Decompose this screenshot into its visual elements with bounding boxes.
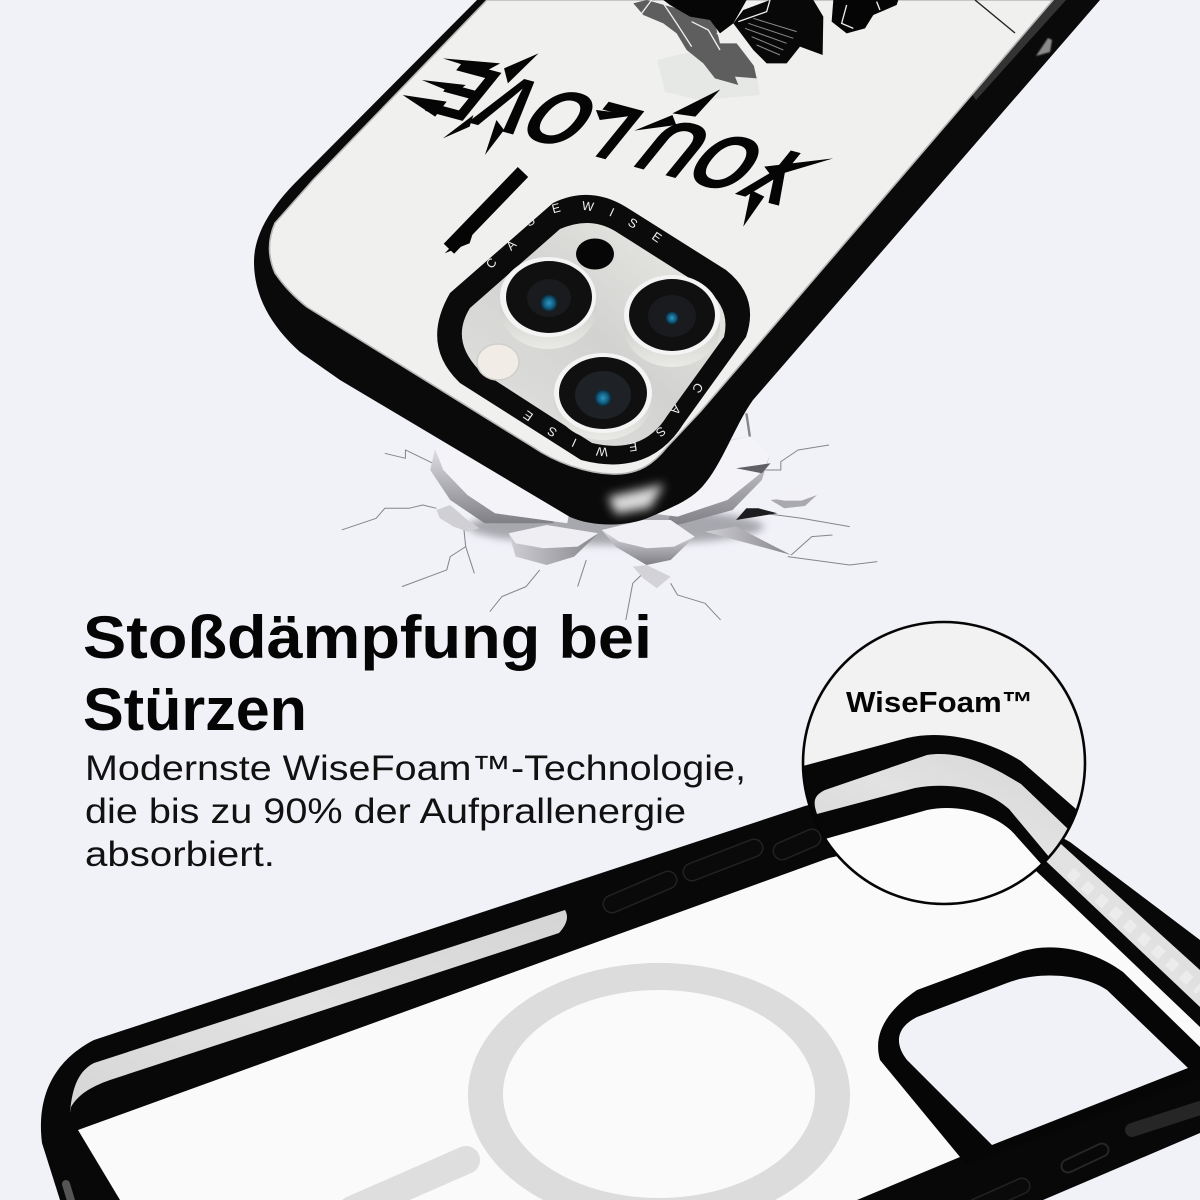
crust: left slab top [435, 430, 581, 523]
clear back [78, 830, 1200, 1200]
rose striped petal [733, 0, 823, 63]
shard E [633, 565, 671, 588]
magnet ring [468, 963, 850, 1200]
foam strip right [1030, 825, 1200, 1007]
bumper label: CASEWISE: E [550, 201, 562, 216]
lens 3 [554, 353, 652, 440]
magnet bar [352, 1160, 466, 1200]
rose grey petal [633, 0, 757, 85]
rose separate petal [832, 0, 898, 33]
shard C [436, 505, 479, 532]
case frame [41, 770, 1200, 1200]
callout: WiseFoam magnifier [802, 620, 1086, 906]
body text: Modernste WiseFoam™-Technologie, [85, 749, 746, 788]
magnifier outline [803, 622, 1085, 904]
bumper highlight at corner [608, 484, 664, 514]
bumper label: CASEWISE: I [607, 205, 616, 220]
crack shadow [467, 508, 764, 545]
rose detail [633, 0, 898, 85]
dark fissures [736, 463, 770, 473]
body text [85, 749, 746, 874]
flash [477, 344, 519, 380]
rose veins [642, 0, 880, 68]
shard B [602, 520, 695, 565]
camera window rim [878, 947, 1200, 1165]
panel: phone with case [254, 0, 1100, 525]
heading: Stoßdämpfung bei [83, 604, 652, 671]
bumper label: CASEWISE: S [653, 424, 668, 440]
body text: absorbiert. [85, 835, 275, 874]
callout label: WiseFoam™ [846, 687, 1033, 719]
shard A [509, 525, 598, 565]
lens 2 [624, 275, 720, 367]
bumper label: CASEWISE: W [581, 199, 595, 214]
bumper grey sheen [972, 0, 1066, 100]
crust: right raised slab [667, 437, 770, 527]
bumper label: CASEWISE: W [595, 444, 609, 459]
bumper label: CASEWISE: A [667, 402, 684, 418]
camera window opening [899, 976, 1188, 1145]
body text: die bis zu 90% der Aufprallenergie [85, 792, 686, 831]
bumper label: CASEWISE: A [503, 237, 520, 253]
illustration: cracked ground [342, 413, 877, 620]
bumper label: CASEWISE [483, 199, 706, 459]
crust: right slab top [650, 437, 770, 517]
mic hole [576, 238, 614, 270]
rose faint shadow [657, 52, 760, 100]
bumper label: CASEWISE: S [523, 213, 538, 230]
lettering splinters [403, 53, 833, 253]
rose black mass [663, 0, 747, 33]
artwork lettering: I: I [410, 133, 561, 288]
case bumper [254, 0, 1100, 525]
bumper label: CASEWISE: C [689, 380, 706, 395]
magnified case corner [804, 735, 1076, 902]
heading [83, 604, 652, 743]
bumper label: CASEWISE: I [570, 435, 579, 450]
bumper label: CASEWISE: S [545, 423, 560, 440]
camera island bumper [437, 195, 750, 464]
crust: left raised slab [430, 450, 554, 523]
shard D [770, 485, 817, 508]
panel: case interior [41, 770, 1200, 1200]
bumper label: CASEWISE: C [483, 255, 500, 271]
foam strip left [70, 910, 567, 1113]
foam hatching [1070, 872, 1200, 990]
hairline artwork [975, 0, 1015, 33]
bumper label: CASEWISE: E [649, 229, 664, 246]
artwork lettering: YOU LOVE: YOU LOVE [409, 46, 831, 220]
artwork: rose [633, 0, 1015, 100]
crack lines [342, 413, 877, 620]
dark fissure right [736, 508, 777, 520]
bumper label: CASEWISE: E [628, 439, 638, 454]
heading: Stürzen [83, 676, 307, 743]
magnifier background [803, 622, 1085, 904]
back panel [270, 0, 1053, 474]
camera plate [462, 223, 725, 446]
bumper label: CASEWISE: S [625, 215, 640, 232]
side buttons [66, 838, 1200, 1200]
lens 1 [500, 257, 596, 349]
bumper label: CASEWISE: E [521, 407, 536, 424]
wedge fissure [705, 527, 791, 555]
bumper side button [1036, 38, 1052, 56]
rose hatching [745, 18, 797, 55]
